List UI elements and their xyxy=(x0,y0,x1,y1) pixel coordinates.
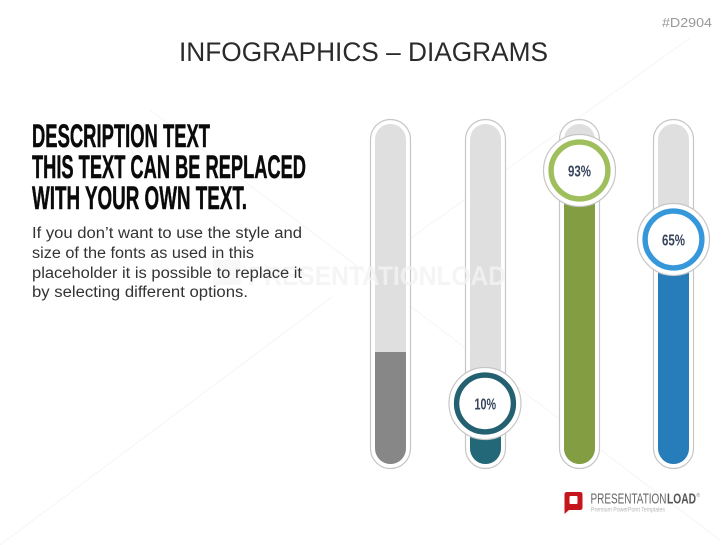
badge: 93% xyxy=(544,134,616,206)
heading xyxy=(32,118,306,216)
bar: teal 10% xyxy=(466,120,506,468)
logo: Premium PowerPoint Templates xyxy=(591,506,666,514)
badge: 65%: 65% xyxy=(662,232,685,250)
badge: 10%: 10% xyxy=(474,396,496,414)
body text: If you don’t want to use the style and xyxy=(32,225,302,242)
bar: grey, no label xyxy=(370,120,410,468)
badge: 93%: 93% xyxy=(568,164,591,180)
body text: size of the fonts as used in this xyxy=(32,245,254,262)
bar: blue 65% xyxy=(654,120,694,468)
logo: ® xyxy=(696,492,700,499)
watermark: PRESENTATIONLOAD xyxy=(248,261,506,291)
badge: 65% xyxy=(638,204,710,276)
logo: LOAD xyxy=(667,492,696,508)
logo: PRESENTATION xyxy=(590,492,666,508)
badge: 10% xyxy=(449,368,521,440)
logo xyxy=(564,492,700,514)
document code: #D2904 xyxy=(662,16,712,30)
bar: green 93% xyxy=(560,120,600,468)
heading: THIS TEXT CAN BE REPLACED xyxy=(32,149,306,185)
heading: DESCRIPTION TEXT xyxy=(32,118,210,154)
body text: by selecting different options. xyxy=(32,284,248,301)
title: INFOGRAPHICS – DIAGRAMS xyxy=(179,37,548,67)
body text: placeholder it is possible to replace it xyxy=(32,265,303,282)
body text xyxy=(32,225,303,301)
heading: WITH YOUR OWN TEXT. xyxy=(32,180,247,216)
